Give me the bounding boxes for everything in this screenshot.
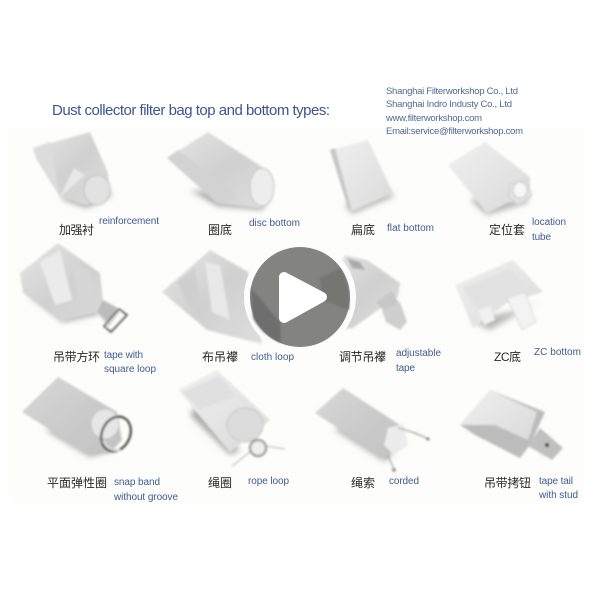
panel: flat bottom [330, 140, 434, 237]
company contact block: Shanghai Indro Industy Co., Ltd [386, 99, 512, 110]
label: reinforcement: reinforcement [99, 216, 159, 227]
icon: play button [244, 241, 356, 353]
label: corded: corded [389, 476, 419, 487]
label: location tube [532, 217, 566, 243]
label: 绳圈: 绳圈 [208, 476, 232, 490]
label: 圈底: 圈底 [208, 222, 232, 237]
icon: flat bottom bag [330, 140, 395, 214]
label: 吊带方环: 吊带方环 [53, 349, 100, 364]
label: 定位套: 定位套 [489, 222, 525, 237]
icon: reinforcement bag [33, 132, 112, 208]
company contact block: www.filterworkshop.com [385, 113, 482, 124]
label: 吊带拷钮: 吊带拷钮 [484, 475, 531, 490]
label: snap band without groove: snap band [114, 477, 160, 488]
panel: rope loop [178, 370, 289, 490]
label: 扁底: 扁底 [351, 222, 375, 237]
label: ZC bottom: ZC bottom [534, 347, 581, 358]
icon: ZC bottom bag [455, 260, 543, 330]
label: adjustable tape: tape [396, 363, 415, 374]
icon: cloth loop bag [162, 250, 262, 344]
icon: square loop bag [20, 243, 127, 332]
company contact block [385, 86, 523, 137]
label: cloth loop: cloth loop [251, 352, 294, 363]
label: tape with square loop: tape with [104, 350, 143, 361]
company contact block: Shanghai Filterworkshop Co., Ltd [386, 86, 518, 97]
label: location tube: location [532, 217, 566, 228]
label: adjustable tape: adjustable [396, 348, 441, 359]
label: tape with square loop: square loop [104, 364, 156, 375]
panel: snap band without groove [22, 377, 178, 503]
label: snap band without groove: without groove [113, 492, 178, 503]
panel: adjustable tape [330, 255, 441, 374]
icon: corded bag [315, 388, 430, 472]
panel: corded [315, 388, 430, 490]
label: location tube: tube [532, 232, 551, 243]
panel: location tube [448, 142, 566, 243]
label: disc bottom: disc bottom [249, 218, 300, 229]
icon: location tube bag [448, 142, 532, 215]
panel: ZC bottom [455, 260, 581, 364]
panel: reinforcement [33, 132, 159, 237]
panel: disc bottom [167, 132, 300, 237]
label: tape tail with stud [538, 476, 578, 501]
label: flat bottom: flat bottom [387, 223, 434, 234]
panel: cloth loop [162, 250, 294, 364]
label: 加强衬: 加强衬 [59, 223, 94, 237]
icon: rope loop bag [178, 370, 285, 466]
label: 布吊襻: 布吊襻 [202, 350, 238, 364]
label: snap band without groove [113, 477, 178, 503]
label: tape tail with stud: tape tail [539, 476, 573, 487]
title: Dust collector filter bag top and bottom types: [52, 102, 330, 119]
company contact block: Email:service@filterworkshop.com [386, 126, 523, 137]
label: 调节吊襻: 调节吊襻 [339, 350, 386, 364]
icon: adjustable tape bag [330, 255, 407, 330]
label: adjustable tape [396, 348, 441, 374]
label: 绳索: 绳索 [351, 476, 375, 490]
label: tape tail with stud: with stud [538, 490, 578, 501]
icon: disc bottom bag [167, 132, 275, 210]
icon: snap band bag [22, 377, 136, 457]
icon: tape tail bag [460, 390, 563, 460]
panel: tape tail with stud [460, 390, 578, 501]
label: rope loop: rope loop [248, 476, 289, 487]
label: 平面弹性圈: 平面弹性圈 [47, 476, 107, 490]
panel: tape with square loop [20, 243, 156, 375]
label: ZC底: ZC底 [494, 349, 521, 364]
label: tape with square loop [104, 350, 156, 375]
